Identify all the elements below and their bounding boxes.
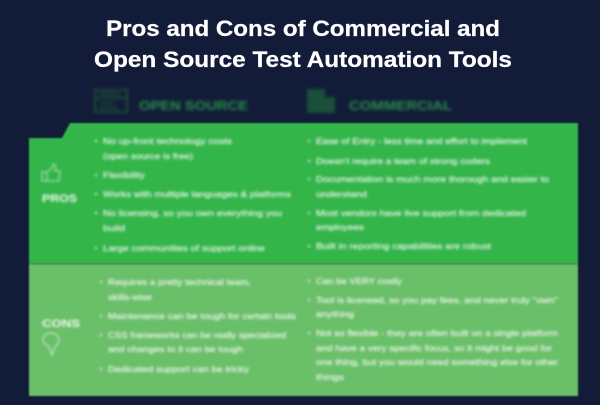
text block: open source cons: CSS frameworks can be really specialized (108, 330, 286, 340)
text block: commercial pros: Ease of Entry - less time and effort to implement (316, 136, 528, 146)
text block: open source pros: (open source is free) (103, 151, 193, 161)
text block: open source pros: No up-front technology costs (103, 136, 232, 146)
heading: commercial: COMMERCIAL (349, 99, 452, 113)
text block: commercial pros: Built in reporting capabilities are robust (316, 241, 492, 251)
text block: open source cons: Dedicated support can be tricky (108, 364, 250, 374)
text block: commercial cons: and have a very specific focus, so it might be good for (316, 343, 552, 353)
column header: open source (95, 90, 248, 113)
pros label (42, 164, 77, 205)
text block: commercial cons: one thing, but you would need something else for other (316, 357, 558, 367)
text block: commercial pros: Documentation is much more thorough and easier to (316, 174, 549, 184)
text block: open source pros (95, 136, 291, 253)
text block: commercial cons: Tool is licensed, so you pay fees, and never truly "own" (316, 295, 558, 305)
text block: open source cons (100, 277, 296, 374)
text block: open source pros: Large communities of support online (103, 243, 265, 253)
text block: open source pros: No licensing, so you own everything you (103, 208, 282, 218)
text block: open source cons: Maintenance can be tough for certain tools (108, 311, 296, 321)
text block: open source cons: Requires a pretty technical team, (108, 277, 251, 287)
text block: commercial cons: Not as flexible - they are often built on a single platform (316, 328, 558, 338)
label: pros: PROS (42, 193, 77, 205)
text block: commercial pros: employees (316, 222, 364, 232)
title (94, 16, 512, 72)
text block: open source cons: skills-wise (108, 292, 152, 302)
text block: commercial pros: Doesn't require a team of strong coders (316, 156, 490, 166)
icon: thumbs down (43, 333, 59, 355)
title: Open Source Test Automation Tools (94, 47, 512, 72)
icon: open source (95, 90, 127, 112)
label: cons: CONS (42, 318, 80, 330)
text block: commercial cons: Can be VERY costly (316, 276, 403, 286)
column header: commercial (307, 89, 452, 113)
icon: thumbs up (42, 164, 60, 181)
text block: open source cons: and changes to it can be tough (108, 344, 243, 354)
panel: cons (29, 264, 578, 396)
text block: open source pros: build (103, 223, 125, 233)
heading: open source: OPEN SOURCE (139, 99, 248, 113)
cons label (42, 318, 80, 355)
text block: commercial cons: things (316, 372, 344, 382)
text block: open source pros: Works with multiple languages & platforms (103, 189, 291, 199)
text block: open source pros: Flexibility (103, 170, 146, 180)
panel: pros (29, 123, 578, 264)
text block: commercial pros (308, 136, 549, 251)
icon: commercial (307, 89, 335, 113)
text block: commercial cons: anything (316, 309, 354, 319)
text block: commercial pros: understand (316, 189, 367, 199)
title: Pros and Cons of Commercial and (106, 16, 500, 41)
text block: commercial pros: Most vendors have live support from dedicated (316, 208, 526, 218)
text block: commercial cons (308, 276, 558, 382)
